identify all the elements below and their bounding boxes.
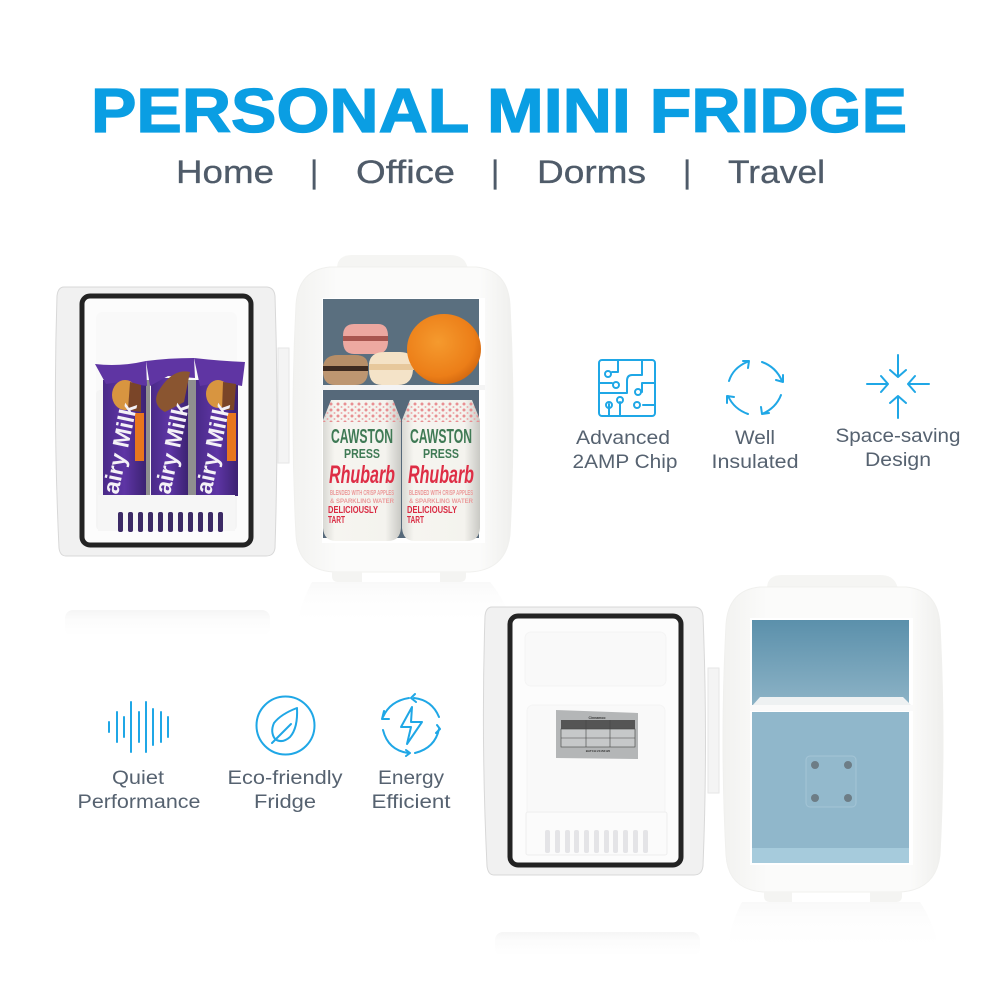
icon: inward arrows bbox=[867, 355, 929, 418]
subtitle: use cases: Home bbox=[176, 154, 274, 190]
fridge 1 door bbox=[55, 287, 277, 556]
shelf bbox=[322, 385, 485, 390]
icon: leaf in circle bbox=[256, 696, 314, 754]
chocolate bars: airy Milk bbox=[97, 400, 142, 496]
fridge 1 body bbox=[293, 255, 513, 582]
floor reflections, top fridge bbox=[65, 582, 510, 636]
feature: well insulated bbox=[712, 361, 798, 473]
label: Eco-friendly bbox=[228, 768, 343, 789]
can 2: CAWSTON bbox=[410, 426, 472, 448]
feature: space-saving bbox=[836, 355, 960, 471]
feature: advanced chip bbox=[572, 360, 678, 473]
subtitle: use cases: | bbox=[310, 154, 318, 190]
label: Design bbox=[865, 450, 931, 471]
door bin with vents bbox=[98, 495, 235, 532]
label: Efficient bbox=[372, 792, 451, 813]
spec label: Cinnamoo bbox=[588, 716, 606, 720]
label: Well bbox=[735, 428, 775, 449]
label: Space-saving bbox=[836, 426, 960, 447]
subtitle: use cases: | bbox=[491, 154, 499, 190]
can 1: CAWSTON bbox=[331, 426, 393, 448]
label: Advanced bbox=[576, 428, 670, 449]
can 1: TART bbox=[328, 515, 345, 526]
mounting plate and screws bbox=[806, 756, 856, 807]
subtitle: use cases: Office bbox=[356, 154, 455, 190]
subtitle: use cases bbox=[176, 154, 825, 190]
icon: sound wave bbox=[109, 702, 168, 752]
icon: circuit chip bbox=[599, 360, 655, 416]
icon: lightning with arrows bbox=[382, 694, 440, 756]
label: Insulated bbox=[712, 452, 798, 473]
can 2: DELICIOUSLY bbox=[407, 505, 457, 516]
feature: quiet performance bbox=[78, 702, 200, 813]
icon: circular arrows bbox=[727, 361, 783, 414]
fridge 2 door bbox=[483, 607, 706, 875]
label: Fridge bbox=[254, 792, 316, 813]
door gasket bbox=[82, 296, 251, 545]
can 2 bbox=[402, 400, 480, 541]
can 1: Rhubarb bbox=[329, 461, 395, 489]
subtitle: use cases: Dorms bbox=[537, 154, 646, 190]
can 1: BLENDED WITH CRISP APPLES bbox=[330, 490, 394, 497]
subtitle: use cases: Travel bbox=[728, 154, 825, 190]
door gasket bbox=[510, 616, 681, 865]
shelf bbox=[750, 697, 913, 711]
subtitle: use cases: | bbox=[683, 154, 691, 190]
label: Performance bbox=[78, 792, 200, 813]
spec label bbox=[556, 710, 638, 759]
chocolate bars: airy Milk bbox=[149, 400, 194, 496]
chocolate bars bbox=[95, 358, 245, 496]
can 2: BLENDED WITH CRISP APPLES bbox=[409, 490, 473, 497]
floor reflections, bottom fridge bbox=[495, 902, 938, 956]
can 2: PRESS bbox=[423, 446, 459, 461]
can 1: DELICIOUSLY bbox=[328, 505, 378, 516]
can 2: TART bbox=[407, 515, 424, 526]
label: Energy bbox=[378, 768, 445, 789]
can 1: PRESS bbox=[344, 446, 380, 461]
hinge bbox=[708, 668, 719, 793]
title: PERSONAL MINI FRIDGE bbox=[91, 77, 907, 146]
label: 2AMP Chip bbox=[572, 452, 678, 473]
fridge 2 body bbox=[723, 575, 943, 902]
spec label: BATCH:21152120 bbox=[586, 749, 611, 753]
hinge bbox=[278, 348, 289, 463]
door bin bbox=[526, 812, 667, 855]
macarons and orange bbox=[323, 314, 481, 385]
feature: eco-friendly bbox=[228, 696, 343, 813]
chocolate bars: airy Milk bbox=[190, 400, 235, 496]
blue interior bbox=[750, 618, 913, 865]
can 1: & SPARKLING WATER bbox=[330, 499, 395, 505]
interior bbox=[322, 298, 485, 543]
can 2: Rhubarb bbox=[408, 461, 474, 489]
can 2: & SPARKLING WATER bbox=[409, 499, 474, 505]
label: Quiet bbox=[112, 768, 165, 789]
can 1 bbox=[323, 400, 401, 541]
feature: energy efficient bbox=[372, 694, 451, 813]
